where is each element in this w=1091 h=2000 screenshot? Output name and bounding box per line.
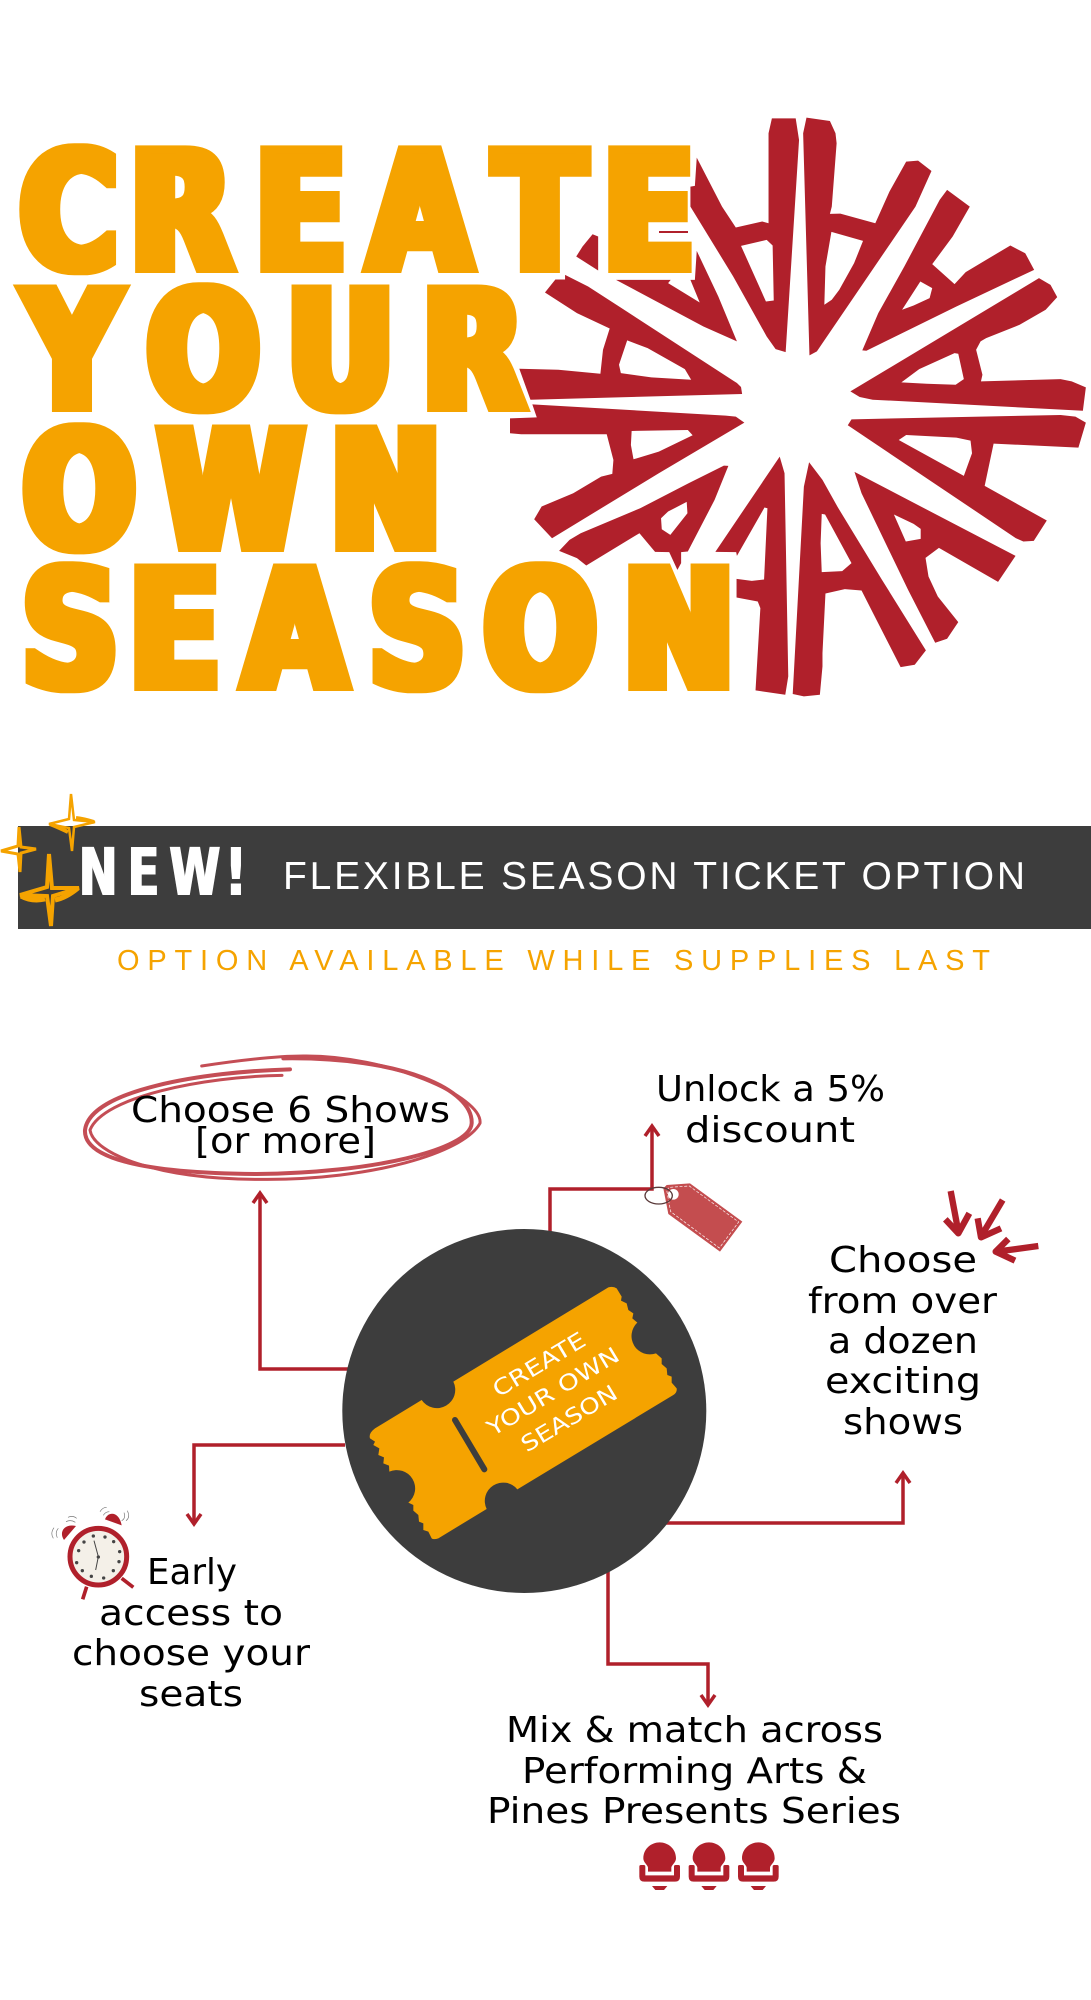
- text: early access: access to: [99, 1593, 283, 1634]
- text: early access: seats: [139, 1674, 243, 1715]
- heading: flexible season ticket option: FLEXIBLE SEASON TICKET OPTION: [283, 855, 1025, 898]
- heading: new: NEW!: [79, 835, 246, 911]
- text: choose from over a dozen: Choose: [829, 1240, 977, 1281]
- text: mix and match: [487, 1710, 901, 1832]
- title: SEASON: [23, 536, 734, 727]
- ticket text: CREATE: [489, 1328, 591, 1403]
- icon: price tag: [645, 1183, 742, 1252]
- panel: new option banner: [18, 826, 1091, 929]
- ticket text: YOUR OWN: [482, 1343, 624, 1442]
- icon: red starburst logo: [510, 118, 1086, 696]
- star fragment inside the final E: [659, 231, 688, 233]
- text: unlock a discount: [656, 1069, 885, 1151]
- icon: orange ticket: [370, 1287, 677, 1539]
- subheading: availability: OPTION AVAILABLE WHILE SUPPLIES LAST: [117, 945, 990, 977]
- icon: three seats: [639, 1842, 779, 1890]
- text: choose 6 shows: [or more]: [195, 1121, 376, 1162]
- icon: alarm clock: [52, 1507, 133, 1599]
- text: unlock a discount: discount: [685, 1110, 855, 1151]
- hand-drawn circle around choose 6 shows: [85, 1056, 480, 1179]
- text: early access: choose your: [72, 1633, 310, 1674]
- text: choose from over a dozen: from over: [808, 1281, 997, 1322]
- text: early access: Early: [147, 1552, 237, 1593]
- text: mix and match: Mix & match across: [506, 1710, 883, 1751]
- title: YOUR: [23, 257, 524, 448]
- text: choose from over a dozen: [808, 1240, 997, 1443]
- text: choose 6 shows: Choose 6 Shows: [131, 1090, 450, 1131]
- connector arrows: [187, 1126, 910, 1705]
- text: early access: [72, 1552, 310, 1715]
- icon: hand-drawn arrows: [945, 1191, 1038, 1261]
- title: OWN: [24, 397, 441, 588]
- text: unlock a discount: Unlock a 5%: [656, 1069, 885, 1110]
- text: choose 6 shows: [131, 1090, 450, 1162]
- ticket text: [482, 1328, 624, 1458]
- text: choose from over a dozen: exciting: [825, 1361, 981, 1402]
- text: mix and match: Performing Arts &: [522, 1751, 867, 1792]
- title: [20, 118, 734, 727]
- title: CREATE: [20, 118, 694, 309]
- text: mix and match: Pines Presents Series: [487, 1791, 901, 1832]
- central circle with ticket: [342, 1229, 706, 1593]
- ticket text: SEASON: [517, 1381, 622, 1458]
- icon: sparkles: [1, 794, 95, 926]
- text: choose from over a dozen: shows: [843, 1402, 963, 1443]
- text: choose from over a dozen: a dozen: [828, 1321, 978, 1362]
